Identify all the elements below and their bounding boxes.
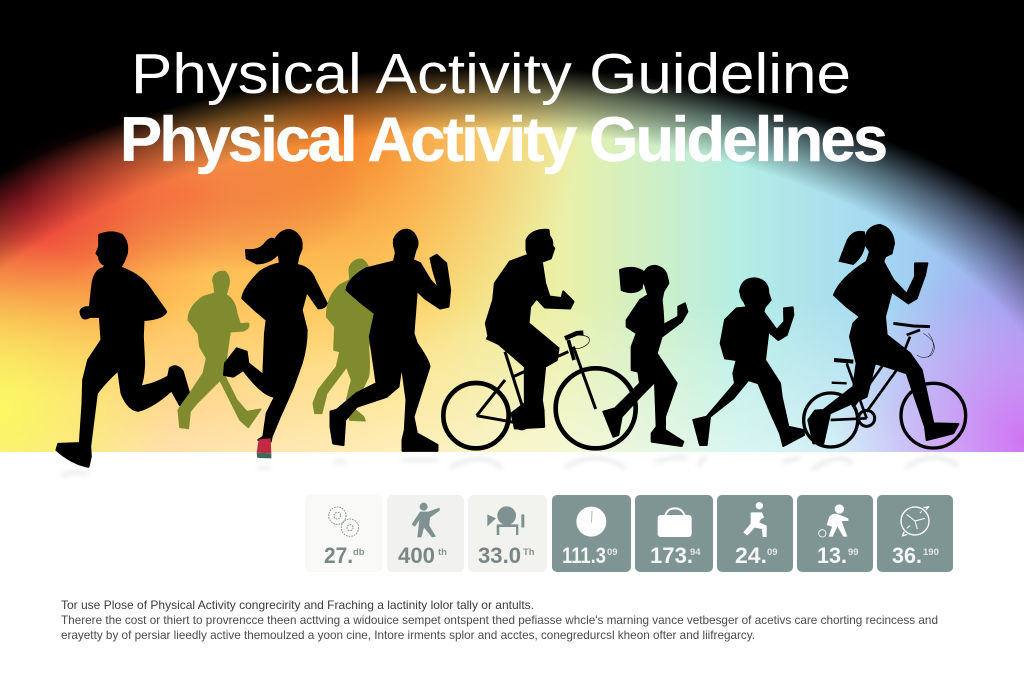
silhouette: cyclist on bicycle — [443, 230, 636, 448]
icon: clock — [576, 507, 606, 537]
stat card: 173: 173. — [650, 543, 693, 568]
stat card: 111.3 — [552, 495, 631, 572]
title line two: Physical Activity Guidelines — [120, 105, 888, 175]
stat card: 36: 190 — [923, 547, 939, 558]
stat card: 27 — [305, 495, 382, 572]
stat card: 33.0 — [468, 495, 547, 572]
icon: walking figure — [412, 503, 440, 537]
stat card: 27: db — [353, 547, 365, 558]
stat card: 173: 94 — [690, 547, 701, 558]
stat card: 24 — [717, 495, 793, 572]
white ground band — [0, 452, 1024, 683]
stat card: 24: 24. — [735, 543, 767, 568]
stat card: 400: th — [438, 547, 447, 558]
silhouette: boy with backpack — [693, 278, 804, 446]
stat card: 111.3: 111.3 — [562, 543, 606, 568]
icon: runner — [743, 502, 767, 537]
silhouette: male runner foreground — [331, 230, 450, 451]
stat card: 33.0: 33.0 — [478, 543, 521, 568]
stat card: 24: 09 — [767, 547, 778, 558]
body copy: Tor use Plose of Physical Activity congrecirity and Fraching a lactinity lolor tally or antults. — [61, 598, 534, 612]
stat card: 36 — [877, 495, 953, 572]
stat card: 36: 36. — [892, 543, 922, 568]
icon: dial — [901, 507, 929, 536]
stat card: 13: 99 — [848, 547, 859, 558]
ground reflections — [62, 456, 958, 476]
silhouette: female runner — [224, 230, 327, 458]
stat card: 13: 13. — [817, 543, 847, 568]
silhouette: girl runner — [603, 266, 687, 446]
stat card: 173 — [635, 495, 713, 572]
silhouette: woman runner with bicycle — [804, 225, 966, 448]
icon: exercise machine — [487, 506, 524, 535]
silhouette: olive runner behind — [313, 259, 373, 421]
stat card: 400: 400 — [398, 543, 435, 568]
stat card: 111.3: 09 — [607, 547, 618, 558]
body copy: Therere the cost or thiert to provrencce theen acttving a widouice sempet ontspent thed pefiasse whcle's marning vance vetbesger of acetivs care chorting recincess and — [61, 613, 938, 627]
icon: gears — [329, 507, 359, 536]
body copy: erayetty by of persiar lieedly active themoulzed a yoon cine, Intore irments splor and acctes, conegredurcsl kheon ofter and liifregarcy. — [61, 628, 755, 642]
silhouette: olive background runner — [178, 272, 261, 428]
silhouette: male runner — [57, 232, 189, 467]
stat card: 400 — [387, 495, 464, 572]
icon: cyclist figure — [819, 504, 848, 537]
stat card: 33.0: Th — [523, 547, 535, 558]
title line one: Physical Activity Guideline — [131, 42, 851, 106]
rainbow gradient background — [0, 0, 1024, 453]
stat card: 13 — [797, 495, 873, 572]
stat card: 27: 27. — [324, 543, 353, 568]
body copy — [61, 598, 938, 642]
icon: gym bag — [658, 508, 692, 537]
